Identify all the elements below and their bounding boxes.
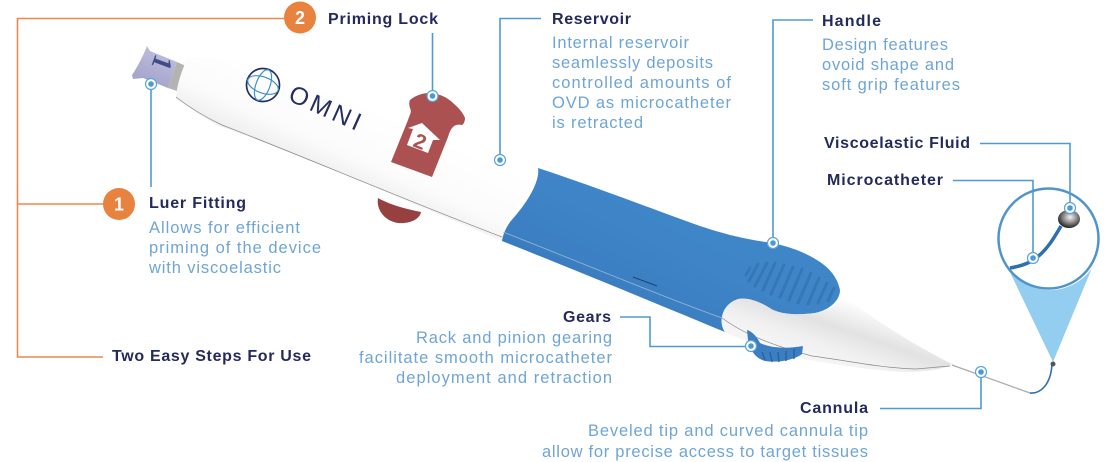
callout: handle: Design features	[822, 36, 948, 54]
orange bracket: two easy steps	[18, 18, 285, 357]
gear wheel	[747, 330, 803, 362]
luer fitting: 1	[145, 51, 179, 74]
orange badge 2	[284, 2, 316, 34]
magnifier circle	[998, 188, 1098, 288]
omni logo	[245, 68, 365, 136]
callout: reservoir: is retracted	[552, 114, 643, 132]
callout: luer fitting: priming of the device	[149, 239, 321, 257]
callout: handle: ovoid shape and	[822, 56, 954, 74]
callout: luer fitting	[103, 78, 321, 277]
callout: handle	[768, 13, 960, 248]
number 2 house icon: 2	[410, 129, 430, 155]
omni logo: OMNI	[285, 80, 365, 136]
callout: gears: Rack and pinion gearing	[416, 329, 612, 347]
lower lock tab	[378, 198, 421, 223]
callout: reservoir	[494, 11, 732, 166]
callout: reservoir: controlled amounts of	[552, 74, 731, 92]
callout: priming lock: Priming Lock	[328, 11, 438, 28]
callout: luer fitting: Luer Fitting	[149, 195, 246, 212]
magnifier cone	[1008, 268, 1092, 362]
callout: reservoir: OVD as microcatheter	[552, 94, 732, 112]
body seam	[176, 97, 502, 237]
orange badge 2: 2	[295, 8, 305, 28]
callout: viscoelastic fluid: Viscoelastic Fluid	[824, 135, 970, 152]
callout: viscoelastic fluid	[824, 135, 1076, 214]
callout: gears: Gears	[563, 309, 611, 326]
callout: priming lock	[284, 2, 438, 102]
grip ridges	[746, 263, 834, 304]
callout: reservoir: Internal reservoir	[552, 34, 690, 52]
device: OMNI handpiece	[132, 46, 952, 372]
orange badge 1	[103, 188, 135, 220]
orange badge 1: 1	[114, 194, 124, 214]
front white tip	[722, 296, 952, 372]
tip seam	[722, 318, 950, 369]
callout: cannula	[542, 366, 986, 461]
luer fitting	[132, 46, 186, 91]
grip seam	[503, 232, 722, 318]
callout: cannula: Beveled tip and curved cannula tip	[588, 422, 868, 440]
callout: luer fitting: with viscoelastic	[148, 259, 281, 277]
callout: reservoir: Reservoir	[552, 11, 631, 28]
callout: gears	[359, 309, 756, 387]
callout: cannula: allow for precise access to target tissues	[542, 443, 868, 461]
callout: reservoir: seamlessly deposits	[552, 54, 713, 72]
priming lock clip	[391, 93, 465, 177]
callout: gears: facilitate smooth microcatheter	[359, 349, 612, 367]
callout: luer fitting: Allows for efficient	[149, 219, 300, 237]
callout: microcatheter	[827, 172, 1038, 264]
callout: gears: deployment and retraction	[396, 369, 612, 387]
callout: handle: Handle	[822, 13, 881, 30]
callout: handle: soft grip features	[822, 76, 960, 94]
body shell	[176, 57, 538, 241]
callout: microcatheter: Microcatheter	[827, 172, 943, 189]
cannula wire	[952, 362, 1056, 393]
rear blue grip	[502, 168, 840, 332]
heading: two easy steps: Two Easy Steps For Use	[112, 348, 311, 365]
callout: cannula: Cannula	[800, 400, 868, 417]
